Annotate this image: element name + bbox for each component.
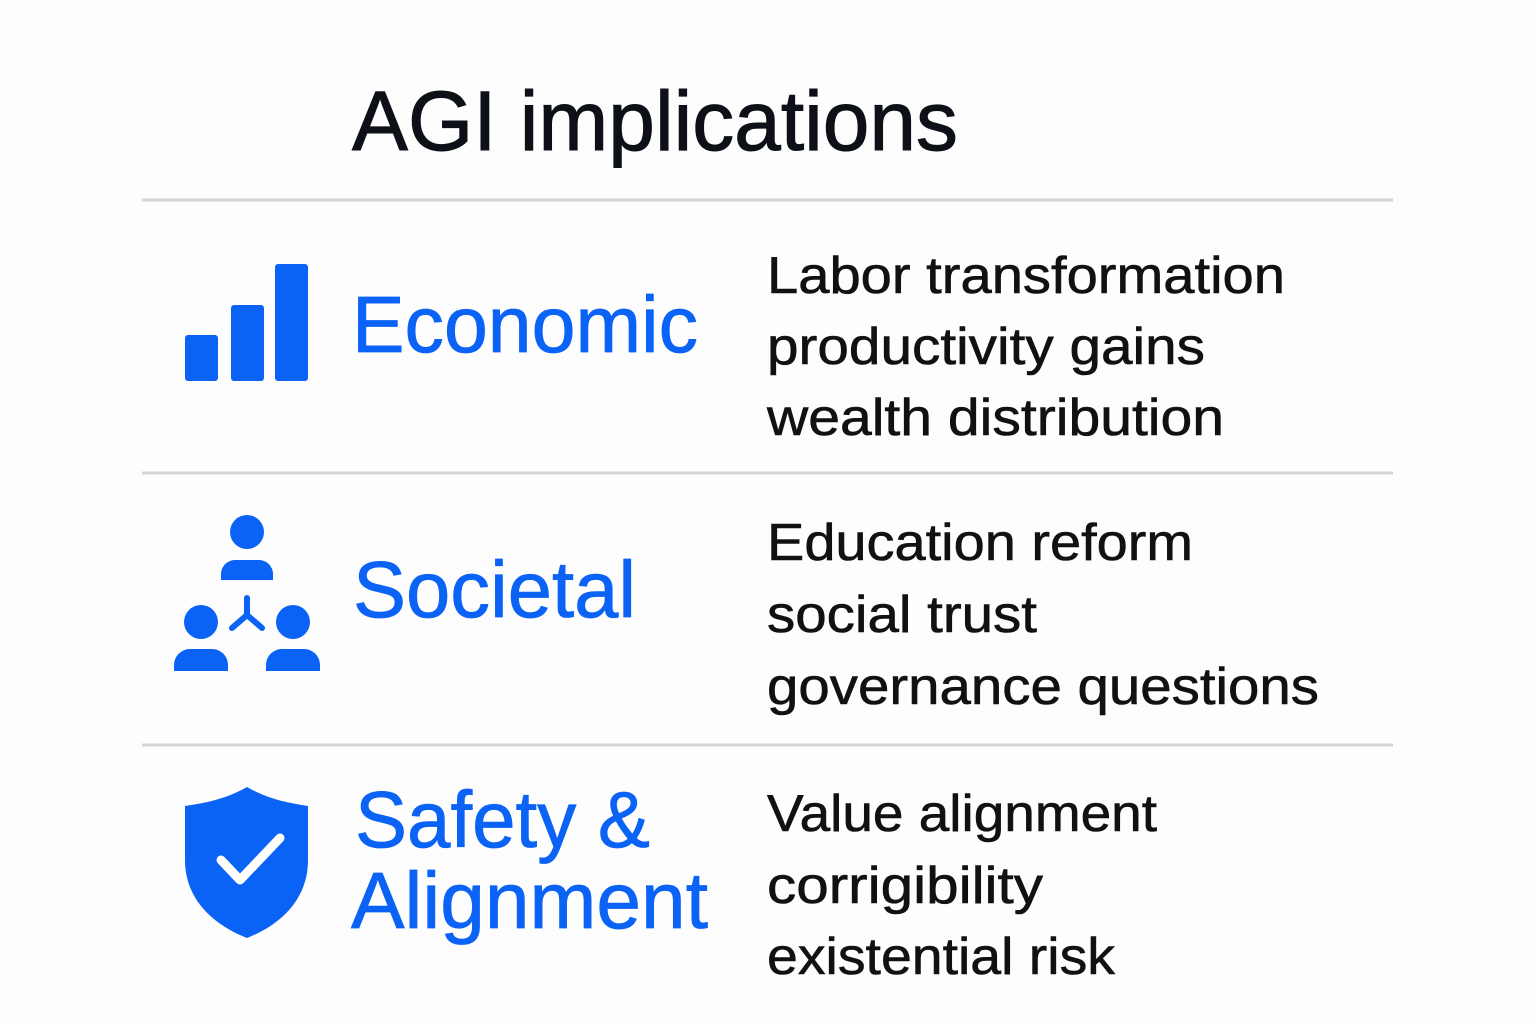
text block: economic points: Labor transformation	[767, 247, 1285, 305]
text block: societal points: Education reform	[767, 514, 1193, 572]
panel: economic	[185, 247, 1285, 447]
title: AGI implications	[352, 74, 958, 168]
text block: economic points: productivity gains	[767, 318, 1205, 376]
text block: societal points: governance questions	[767, 658, 1319, 716]
panel: societal	[174, 514, 1319, 716]
icon: people network	[174, 515, 320, 671]
icon: shield check	[185, 787, 308, 938]
heading: Safety & Alignment: Alignment	[351, 856, 708, 945]
text block: economic points	[766, 247, 1285, 447]
text block: safety points	[767, 785, 1158, 986]
heading: Societal: Societal	[353, 545, 636, 634]
panel: safety	[185, 775, 1158, 986]
text block: safety points: corrigibility	[767, 857, 1043, 915]
heading: Safety & Alignment	[351, 775, 708, 945]
text block: safety points: Value alignment	[767, 785, 1158, 843]
heading: Economic: Economic	[352, 280, 698, 369]
text block: economic points: wealth distribution	[766, 389, 1224, 447]
icon: bar chart	[185, 264, 308, 381]
text block: societal points: social trust	[767, 586, 1038, 644]
text block: safety points: existential risk	[767, 928, 1116, 986]
text block: societal points	[767, 514, 1319, 716]
heading: Safety & Alignment: Safety &	[355, 775, 650, 864]
